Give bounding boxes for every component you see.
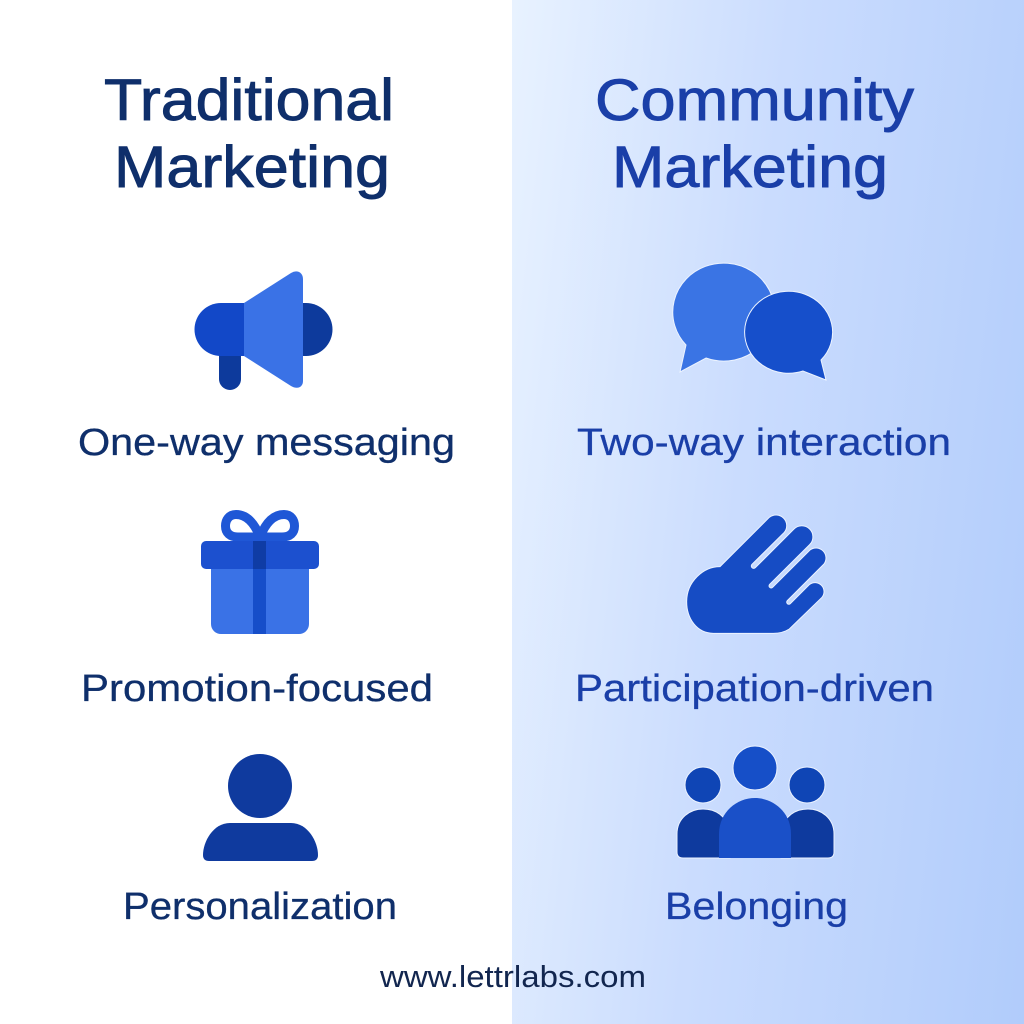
heading: Traditional Marketing: Traditional — [104, 68, 394, 133]
label: two-way interaction: Two-way interaction — [577, 422, 951, 464]
heading: Traditional Marketing: Marketing — [114, 135, 390, 200]
label: promotion-focused: Promotion-focused — [81, 668, 433, 710]
heading: Community Marketing: Community — [595, 68, 914, 133]
icon: single person — [203, 754, 318, 861]
label: one-way messaging: One-way messaging — [78, 422, 455, 464]
icon: megaphone — [194, 271, 332, 390]
panel: traditional marketing background — [0, 0, 512, 1024]
label: belonging: Belonging — [665, 886, 848, 928]
icon: raised hand — [687, 515, 826, 633]
heading: Community Marketing — [595, 68, 914, 200]
heading: Traditional Marketing — [104, 68, 394, 200]
heading: Community Marketing: Marketing — [612, 135, 888, 200]
icon: group of people — [677, 746, 834, 858]
label: personalization: Personalization — [123, 886, 397, 928]
panel: community marketing background — [512, 0, 1024, 1024]
icon: gift box — [201, 514, 319, 634]
footer: website url: www.lettrlabs.com — [379, 959, 646, 994]
icon: speech bubbles — [673, 263, 833, 380]
label: participation-driven: Participation-driven — [575, 668, 934, 710]
